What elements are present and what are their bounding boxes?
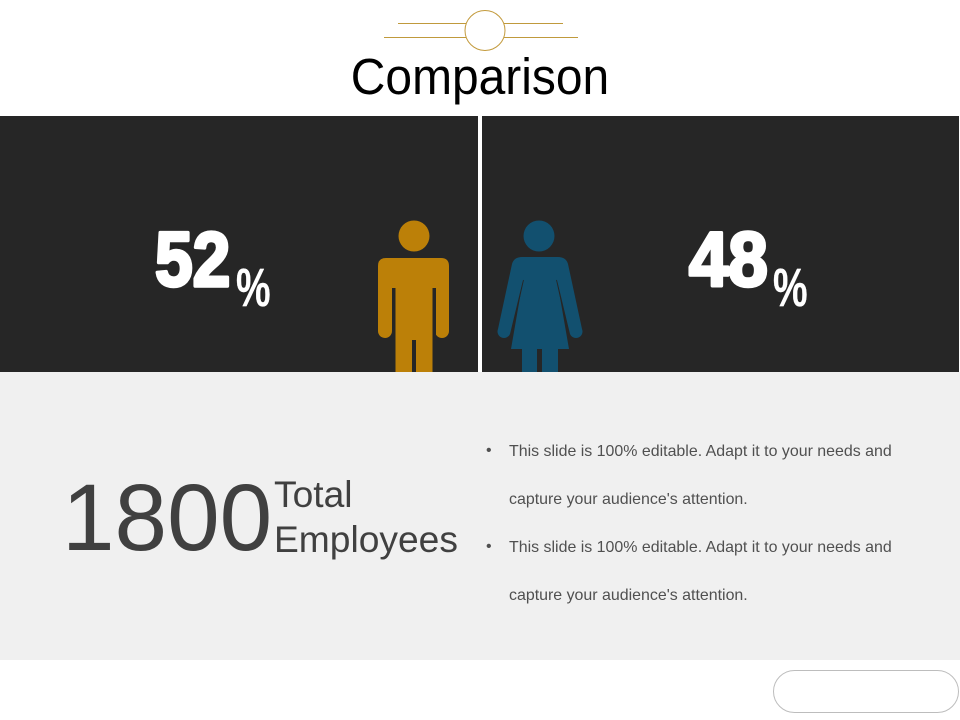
stat: 52 percent [155,217,271,317]
bullet list: • [486,538,492,555]
stat: 52 percent: % [236,257,271,317]
panel: right dark panel [482,116,959,372]
bullet list: capture your audience's attention. [509,491,748,508]
icon: title ornament [384,10,578,50]
bullet list: • [486,442,492,459]
bullet list: This slide is 100% editable. Adapt it to your needs and [509,539,892,556]
panel: left dark panel [0,116,478,372]
icon: woman [498,220,582,372]
stat: 1800: 1800 [62,465,272,571]
label: total employees [274,473,458,560]
panel: lower grey panel [0,372,960,660]
stat: 52 percent: 52 [155,217,230,303]
rounded button outline [774,670,958,712]
label: total employees: Total [274,473,353,515]
bullet list [486,442,892,604]
stat: 48 percent: 48 [689,216,768,303]
icon: man [378,220,449,372]
label: total employees: Employees [274,518,458,560]
stat: 48 percent: % [773,257,808,317]
title: Comparison [351,49,609,105]
bullet list: capture your audience's attention. [509,587,748,604]
bullet list: This slide is 100% editable. Adapt it to your needs and [509,443,892,460]
stat: 48 percent [689,216,808,317]
